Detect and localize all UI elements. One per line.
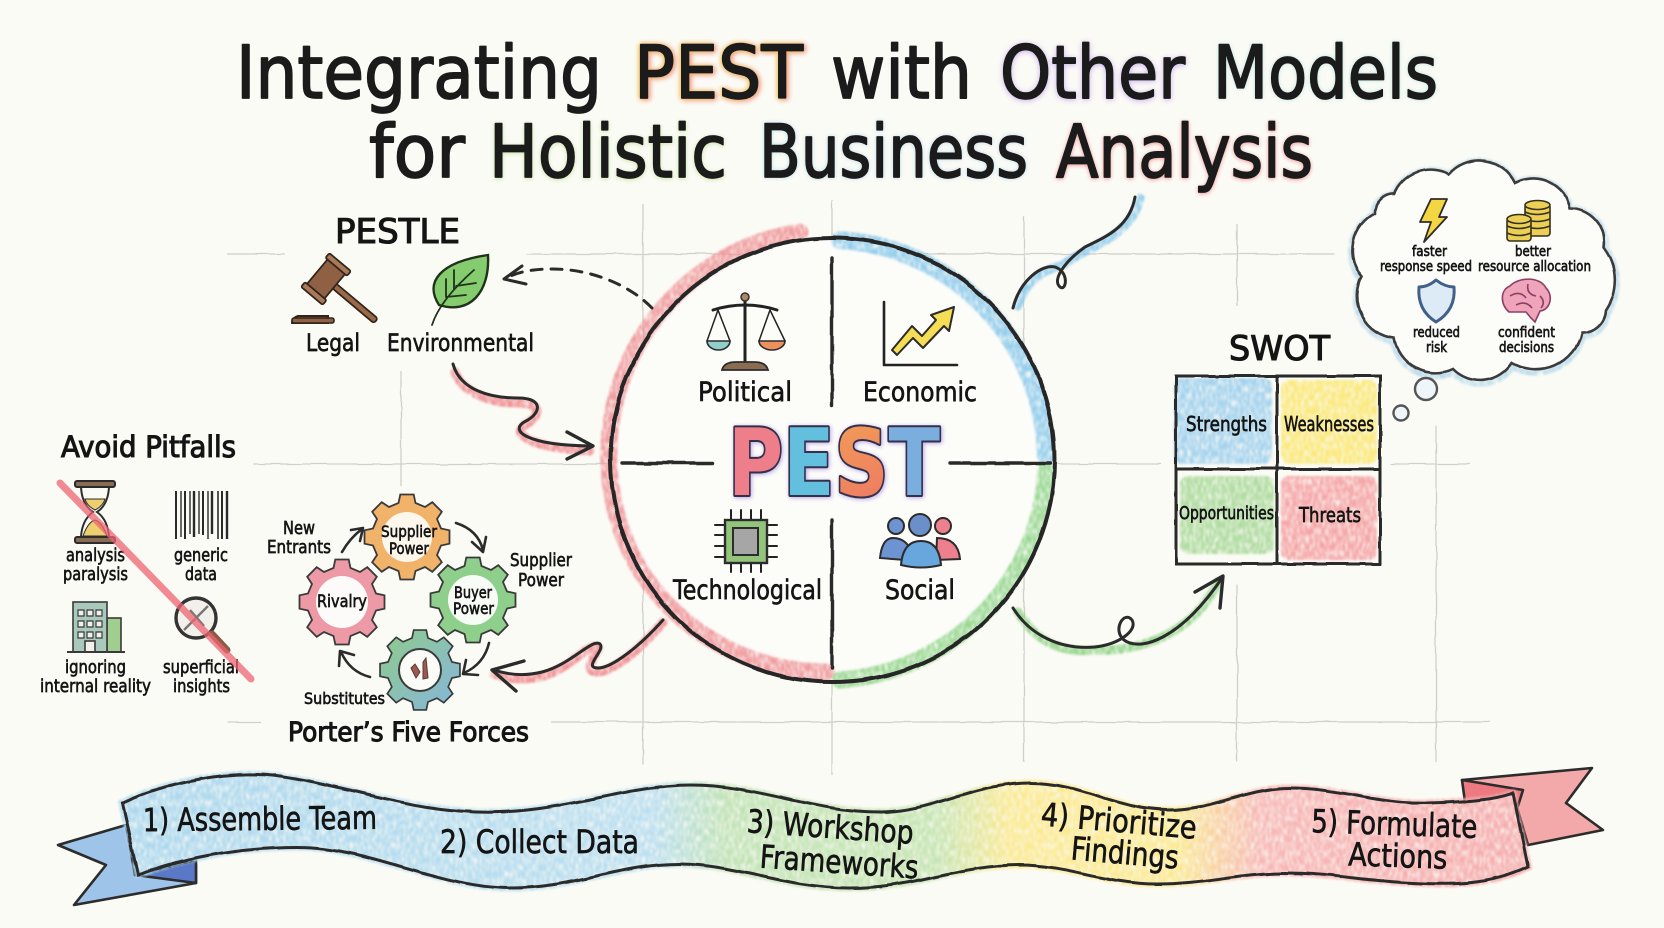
title: Integrating — [236, 31, 602, 116]
label: Weaknesses: Weaknesses — [1284, 412, 1374, 436]
label: New Entrants: Entrants — [267, 537, 331, 558]
ribbon body — [122, 774, 1528, 888]
label: reduced risk — [1413, 325, 1460, 356]
label: faster response speed: response speed — [1380, 259, 1472, 275]
step 4 — [1040, 795, 1198, 877]
label: Substitutes: Substitutes — [304, 689, 385, 708]
thought bubble small — [1394, 406, 1408, 420]
arrow: dashed PEST to Environmental — [504, 266, 652, 308]
panel: SWOT — [1174, 329, 1380, 564]
panel: process ribbon — [58, 768, 1603, 905]
gear: Rivalry — [300, 560, 384, 644]
gear: Supplier Power: Supplier — [381, 522, 437, 541]
ribbon left tail — [58, 825, 196, 905]
arrow: PEST to SWOT — [1013, 576, 1223, 651]
ribbon right tail — [1462, 768, 1603, 845]
label: analysis paralysis: paralysis — [63, 564, 128, 585]
label: generic data: data — [185, 564, 217, 585]
icon: leaf — [432, 255, 488, 325]
title: Models — [1213, 31, 1438, 116]
label: Political: Political — [698, 377, 792, 408]
icon: shield — [1419, 280, 1454, 322]
label: confident decisions: decisions — [1499, 340, 1554, 356]
title: Analysis — [1056, 110, 1313, 195]
label: analysis paralysis: analysis — [66, 545, 125, 566]
title: with — [831, 31, 972, 116]
thought bubble large — [1415, 378, 1437, 400]
label: Technological: Technological — [672, 575, 822, 606]
step 3: 3) Workshop — [746, 802, 915, 852]
step 2: 2) Collect Data — [440, 823, 639, 861]
gear: Supplier Power — [364, 494, 450, 580]
icon: hourglass — [75, 481, 115, 543]
arrow: PEST to Porter's Five Forces — [492, 620, 663, 691]
gear: Buyer Power: Power — [453, 599, 494, 618]
step 5 — [1311, 802, 1478, 877]
label: Supplier Power: Supplier — [510, 550, 572, 571]
label: reduced risk: reduced — [1413, 325, 1460, 341]
step 4: Findings — [1070, 829, 1180, 877]
heading: Avoid Pitfalls: Avoid Pitfalls — [61, 430, 236, 464]
label: analysis paralysis — [63, 545, 128, 585]
gear: Substitutes — [380, 630, 460, 710]
label: better resource allocation: better — [1515, 244, 1551, 260]
icon: magnifier — [176, 598, 227, 650]
label: Supplier Power — [510, 550, 572, 591]
icon: barcode — [176, 491, 227, 539]
label: confident decisions — [1498, 325, 1555, 356]
matrix grid — [1176, 376, 1380, 564]
arrow: PEST to benefits cloud — [1013, 197, 1140, 308]
label: better resource allocation: resource allocation — [1478, 259, 1591, 275]
icon: gavel — [292, 253, 390, 338]
label: New Entrants: New — [283, 518, 315, 539]
label: faster response speed: faster — [1412, 244, 1447, 260]
label: ignoring internal reality — [40, 657, 151, 697]
label: New Entrants — [267, 518, 331, 558]
step 4: 4) Prioritize — [1040, 795, 1198, 847]
heading: Porter's Five Forces: Porter’s Five Forces — [288, 717, 529, 748]
label: better resource allocation — [1478, 244, 1591, 275]
label: Social: Social — [885, 575, 955, 606]
label: superficial insights: insights — [173, 676, 230, 697]
label: generic data: generic — [174, 545, 228, 566]
step 3 — [746, 802, 920, 887]
centre word PEST: PEST — [728, 409, 940, 517]
icon: brain — [1502, 279, 1550, 322]
label: ignoring internal reality: internal reality — [40, 676, 151, 697]
circle outline and dividers — [610, 238, 1054, 682]
title: Business — [759, 110, 1028, 195]
arrow: PESTLE into PEST — [453, 364, 593, 459]
heading: PESTLE: PESTLE — [335, 212, 460, 252]
panel: Avoid Pitfalls — [40, 430, 251, 697]
label: generic data — [174, 545, 228, 585]
crayon arcs around the circle — [609, 232, 1046, 680]
step 5: Actions — [1348, 835, 1448, 877]
title: for — [369, 110, 466, 195]
quadrant colour fills — [1174, 378, 1377, 560]
icon: people — [880, 514, 960, 568]
label: confident decisions: confident — [1498, 325, 1555, 341]
panel: PESTLE — [292, 212, 534, 357]
title — [236, 31, 1438, 195]
panel: benefits thought cloud — [1352, 160, 1615, 421]
heading: SWOT: SWOT — [1229, 329, 1330, 369]
label: Threats: Threats — [1298, 503, 1361, 527]
title: Holistic — [489, 110, 727, 195]
label: Environmental: Environmental — [387, 329, 534, 357]
label: Supplier Power: Power — [518, 570, 565, 591]
icon: office building — [67, 602, 125, 652]
title: PEST — [634, 31, 803, 116]
icon: scales — [707, 293, 785, 370]
label: Legal: Legal — [306, 329, 360, 357]
gear: Rivalry: Rivalry — [317, 592, 367, 612]
cloud shape — [1352, 160, 1615, 382]
icon: lightning bolt — [1420, 199, 1447, 242]
gear: Buyer Power — [430, 558, 516, 642]
gear: Buyer Power: Buyer — [454, 583, 492, 602]
label: superficial insights: superficial — [163, 657, 239, 678]
icon: rising chart — [884, 302, 957, 365]
step 5: 5) Formulate — [1311, 802, 1478, 846]
icon: microchip — [715, 510, 777, 572]
step 3: Frameworks — [759, 838, 920, 887]
label: reduced risk: risk — [1426, 340, 1448, 356]
icon: coins — [1507, 200, 1550, 241]
panel: Porter's Five Forces — [267, 494, 572, 748]
red strike line — [60, 483, 251, 679]
step 1: 1) Assemble Team — [143, 799, 377, 839]
gear cycle arrows — [339, 523, 489, 677]
label: Economic: Economic — [863, 377, 977, 408]
label: faster response speed — [1380, 244, 1472, 275]
label: Opportunities: Opportunities — [1179, 503, 1274, 524]
gear: Supplier Power: Power — [389, 539, 429, 558]
label: superficial insights — [163, 657, 239, 697]
label: Strengths: Strengths — [1186, 412, 1267, 436]
label: ignoring internal reality: ignoring — [65, 657, 126, 678]
panel: PEST circle — [609, 232, 1054, 682]
title: Other — [1000, 31, 1186, 116]
